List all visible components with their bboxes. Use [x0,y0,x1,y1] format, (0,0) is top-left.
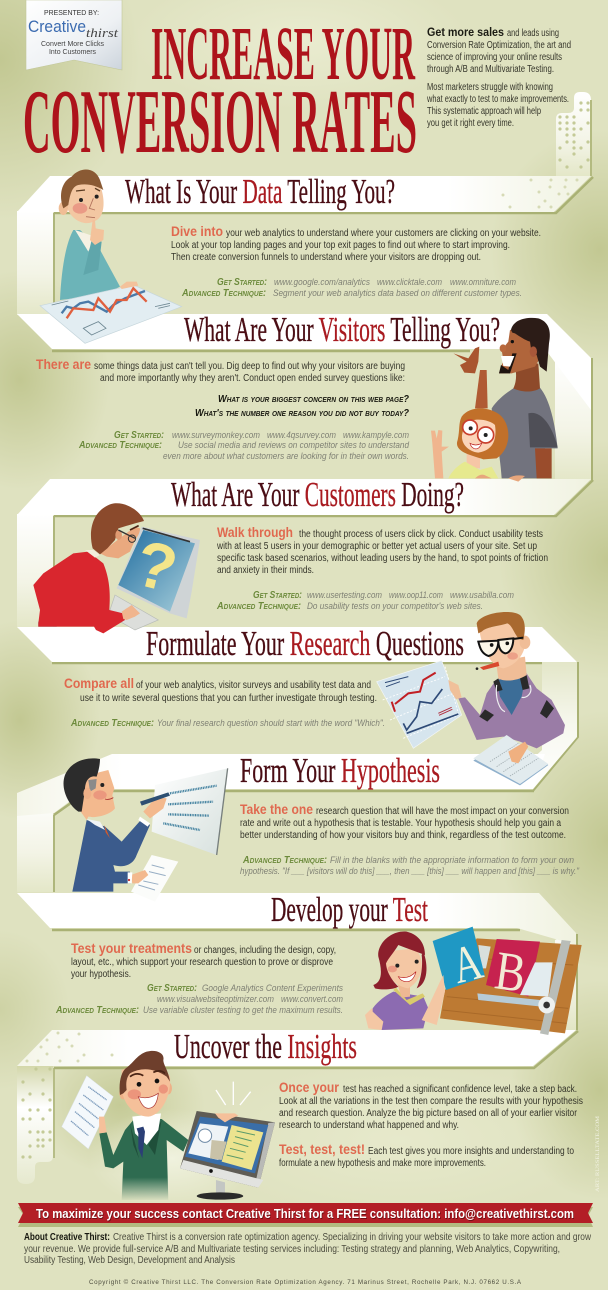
intro text: Most marketers struggle with knowing [427,82,553,93]
body: test: or changes, including the design, copy, [194,945,336,956]
resources: test: www.convert.com [281,994,343,1005]
body: data: your web analytics to understand where your customers are clicking on your website. [226,228,541,239]
resources: test: Use variable cluster testing to get the maximum results. [143,1005,343,1016]
text: about creative thirst: Usability Testing, Web Design, Development and Analysis [24,1255,235,1266]
panel: visitors [36,310,558,482]
icon: woman with A and B cards [365,927,582,1035]
survey questions: What's the number one reason you did not buy today? [195,408,409,419]
body: customers: and anxiety in their minds. [217,565,314,576]
icon: man at monitor: ? [128,526,184,606]
body: test: Test your treatments [71,941,192,956]
icon: man at monitor [33,503,200,633]
body: customers: specific task based scenarios, without leading users by the hand, to spot points of friction [217,553,548,564]
body: customers: with at least 5 users in your demographic or better yet actual users of your site. Set up [216,541,537,552]
intro text: Conversion Rate Optimization, the art and [427,40,571,51]
body: insights: Each test gives you more insights and understanding to [368,1146,574,1157]
badge: presented by: thirst [86,25,118,40]
panel: customers [33,475,548,633]
badge: presented by: Into Customers [49,47,96,56]
body: visitors: some things data just can't tell you. Dig deep to find out why your visitors are buying [94,361,405,372]
resources: visitors [78,430,410,462]
icon: thinking man with chart [40,170,182,343]
body: data: Look at your top landing pages and your top exit pages to find out where to start improving. [171,240,510,251]
body: data [171,224,541,263]
resources: customers: www.oop11.com [389,590,443,601]
resources: hypothesis: Advanced Technique: [242,855,327,866]
intro text: through A/B and Multivariate Testing. [427,64,554,75]
resources: data: Get Started: [217,277,267,288]
resources: data: www.omniture.com [450,277,516,288]
intro text: Get more sales [427,25,504,39]
body: insights: Once your [279,1080,340,1095]
badge: presented by: Convert More Clicks [41,39,104,48]
resources: data: www.clicktale.com [377,277,442,288]
panel: insights [62,1027,583,1208]
resources: customers: Advanced Technique: [216,601,301,612]
badge: presented by [26,0,122,70]
survey questions [195,394,409,419]
heading: data: What Is Your Data Telling You? [125,172,395,211]
icon: man and girl [431,318,558,482]
resources: customers: www.usertesting.com [307,590,382,601]
body: insights: formulate a new hypothesis and make more improvements. [279,1158,486,1169]
ribbon 1 [17,176,593,315]
intro text: science of improving your online results [427,52,562,63]
icon: woman with A and B cards: B [491,939,530,1004]
icon: man writing on board [64,758,228,902]
intro text [426,25,571,129]
body: hypothesis [240,802,569,841]
body: visitors [36,357,405,384]
resources: test: Get Started: [147,983,197,994]
resources: customers: Get Started: [253,590,302,601]
icon: woman with A and B cards: A [447,933,488,995]
body: test [71,941,336,980]
banner: call to action [18,1203,593,1227]
resources: visitors: www.4qsurvey.com [267,430,336,441]
resources: visitors: even more about what customers are looking for in their own words. [163,451,409,462]
intro text: This systematic approach will help [427,106,541,117]
heading: customers: What Are Your Customers Doing? [171,475,464,514]
body: customers [216,525,548,576]
ribbon 3 [17,479,593,627]
ribbon 5 [17,754,545,892]
body: visitors: and more importantly why they aren't. Conduct open ended survey questions like: [100,373,405,384]
badge: presented by: Creative [28,17,86,36]
text: about creative thirst: About Creative Thirst: [24,1232,110,1243]
body: insights [279,1080,583,1169]
resources: customers [216,590,514,612]
ribbon 7 [17,1030,578,1184]
panel: test [55,890,582,1035]
body: research: of your web analytics, visitor surveys and usability test data and [136,680,371,691]
resources: data: Advanced Technique: [181,288,266,299]
resources: test: Google Analytics Content Experiments [202,983,343,994]
resources: data: Segment your web analytics data based on different customer types. [273,288,522,299]
resources: customers: www.usabilla.com [450,590,514,601]
resources: data [181,277,522,299]
body: hypothesis: research question that will have the most impact on your conversion [316,806,569,817]
survey questions: What is your biggest concern on this web page? [218,394,409,405]
text: art credit: ART: RUSSELLTATE.COM [595,1116,601,1192]
resources: research: Advanced Technique: [70,718,154,729]
resources: visitors: www.surveymonkey.com [172,430,260,441]
resources: test [55,983,343,1016]
body: insights: Test, test, test! [279,1142,365,1157]
resources: data: www.google.com/analytics [274,277,370,288]
badge: presented by: PRESENTED BY: [44,8,99,17]
icon: man presenting monitor [62,1051,275,1208]
resources: visitors: Advanced Technique: [78,440,162,451]
body: research: Compare all [64,676,134,691]
resources: hypothesis [240,855,579,877]
intro text: and leads using [507,28,559,39]
resources: customers: Do usability tests on your competitor's web sites. [307,601,483,612]
resources: research [70,718,385,729]
ribbon strip: top right [556,92,591,176]
heading: insights: Uncover the Insights [174,1027,357,1066]
body: customers: the thought process of users click by click. Conduct usability tests [299,529,543,540]
heading: research questions: Formulate Your Research Questions [146,624,464,663]
body: data: Dive into [171,224,223,239]
heading: test: Develop your Test [271,890,428,929]
ribbon 6 [17,893,577,1030]
heading: visitors: What Are Your Visitors Telling You? [184,310,500,349]
body: customers: Walk through [217,525,293,540]
resources: test: Advanced Technique: [55,1005,139,1016]
title [23,12,417,172]
resources: visitors: Use social media and reviews on competitor sites to understand [178,440,410,451]
panel: data [40,170,541,343]
body: hypothesis: Take the one [240,802,313,817]
intro text: you get it right every time. [427,118,514,129]
body: data: Then create conversion funnels to understand where your visitors are dropping out. [171,252,481,263]
text: about creative thirst [24,1232,592,1266]
resources: test: www.visualwebsiteoptimizer.com [157,994,274,1005]
body: test: your hypothesis. [71,969,131,980]
resources: visitors: Get Started: [114,430,164,441]
body: insights: research to understand what happened and why. [279,1120,459,1131]
ribbon 4 [17,627,578,791]
body: research: use it to write several questions that you can further investigate through testing. [80,693,377,704]
resources: hypothesis: Fill in the blanks with the appropriate information to form your own [330,855,574,866]
text: copyright: Copyright © Creative Thirst LLC. The Conversion Rate Optimization Agency. 71 Marinus Street, Rochelle Park, N.J. 07662 U.S.A [89,1279,522,1286]
body: visitors: There are [36,357,91,372]
body: test: layout, etc., which support your research question to prove or disprove [71,957,333,968]
resources: research: Your final research question should start with the word "Which". [157,718,385,729]
ribbon 2 [17,314,592,480]
panel: research questions [64,612,565,785]
resources: visitors: www.kampyle.com [343,430,409,441]
heading: hypothesis: Form Your Hypothesis [240,751,440,790]
body: research [64,676,377,704]
panel: hypothesis [64,751,579,902]
icon: man with chart and pencil [377,612,565,785]
